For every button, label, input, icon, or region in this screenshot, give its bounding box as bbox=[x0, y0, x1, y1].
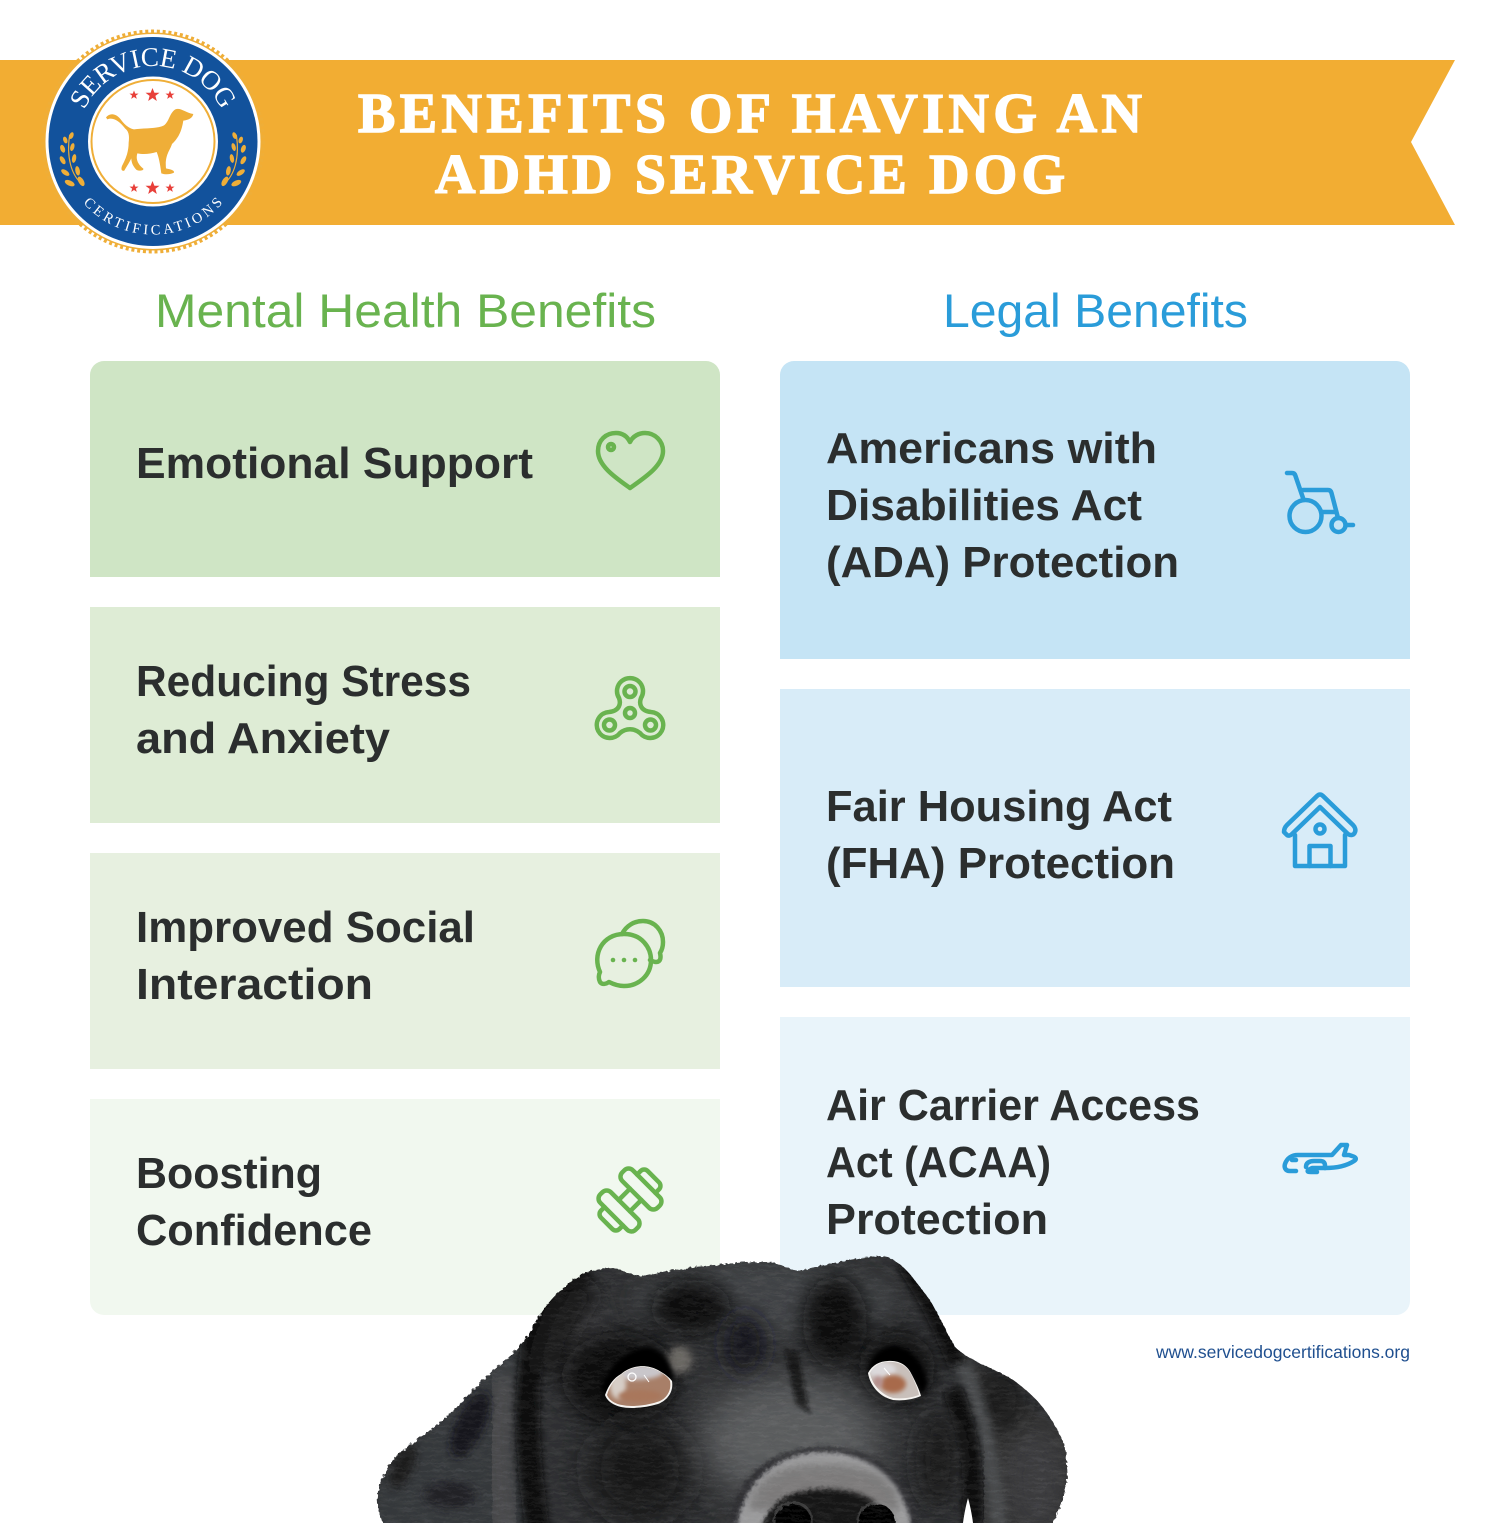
panel: Reducing Stress and Anxiety: and Anxiety bbox=[136, 714, 391, 763]
panel: Fair Housing Act: (FHA) Protection bbox=[826, 839, 1175, 888]
logo badge: Service Dog Certifications: SERVICE DOG bbox=[71, 48, 235, 108]
website url: www.servicedogcertifications.org bbox=[1155, 1342, 1410, 1362]
panel: Air Carrier Access Act: Protection bbox=[826, 1195, 1048, 1244]
panel: Air Carrier Access Act: Air Carrier Access bbox=[826, 1081, 1200, 1130]
panel: Boosting Confidence: Confidence bbox=[136, 1206, 372, 1255]
dark zones around eyes and jaw bbox=[562, 1332, 678, 1424]
logo badge: Service Dog Certifications: CERTIFICATIONS bbox=[85, 198, 222, 235]
panel: Air Carrier Access Act bbox=[780, 1017, 1410, 1315]
panel: Fair Housing Act: Fair Housing Act bbox=[826, 782, 1172, 831]
heading: Mental Health Benefits: Mental Health Benefits bbox=[155, 284, 656, 337]
panel: Reducing Stress and Anxiety: Reducing Stress bbox=[136, 657, 471, 706]
icon: chat bubbles bbox=[597, 921, 663, 986]
light patch by left eye bbox=[668, 1346, 692, 1374]
panel: Reducing Stress and Anxiety bbox=[90, 607, 720, 823]
panel: Improved Social Interaction: Improved Social bbox=[136, 903, 475, 952]
muzzle bbox=[700, 1378, 880, 1502]
panel: Americans with Disabilities Act: (ADA) Protection bbox=[826, 538, 1179, 587]
panel: Fair Housing Act bbox=[780, 689, 1410, 987]
ear gap bbox=[963, 1498, 973, 1523]
panel: Emotional Support: Emotional Support bbox=[136, 439, 533, 488]
title bbox=[358, 83, 1142, 206]
icon: wheelchair bbox=[1287, 473, 1353, 532]
title banner ribbon bbox=[0, 60, 1455, 225]
panel: Boosting Confidence bbox=[90, 1099, 720, 1315]
forehead tone bbox=[635, 1260, 895, 1340]
title: BENEFITS OF HAVING AN bbox=[358, 83, 1142, 145]
icon: house bbox=[1284, 794, 1355, 866]
brow patches bbox=[651, 1280, 731, 1336]
left eye bbox=[600, 1347, 676, 1410]
icon: airplane bbox=[1285, 1145, 1356, 1172]
title: ADHD SERVICE DOG bbox=[435, 144, 1065, 206]
panel: Air Carrier Access Act: Act (ACAA) bbox=[826, 1138, 1051, 1187]
nose bbox=[733, 1444, 886, 1510]
panel: Boosting Confidence: Boosting bbox=[136, 1149, 322, 1198]
panel: Emotional Support bbox=[90, 361, 720, 577]
illustration: black labrador looking up bbox=[376, 1256, 1068, 1523]
panel: Americans with Disabilities Act bbox=[780, 361, 1410, 659]
icon: fidget spinner bbox=[597, 678, 663, 738]
icon: dumbbell bbox=[589, 1159, 671, 1241]
panel: Improved Social Interaction bbox=[90, 853, 720, 1069]
panel: Americans with Disabilities Act: Americans with bbox=[826, 424, 1157, 473]
right eye bbox=[865, 1346, 928, 1403]
right ear bbox=[955, 1347, 1070, 1523]
panel: Improved Social Interaction: Interaction bbox=[136, 960, 373, 1009]
logo badge: Service Dog Certifications bbox=[46, 30, 260, 254]
left ear bbox=[375, 1328, 545, 1523]
fur texture bbox=[378, 1258, 1066, 1523]
heading: Legal Benefits: Legal Benefits bbox=[943, 284, 1248, 337]
icon: heart bbox=[598, 433, 663, 488]
panel: Americans with Disabilities Act: Disabilities Act bbox=[826, 481, 1142, 530]
